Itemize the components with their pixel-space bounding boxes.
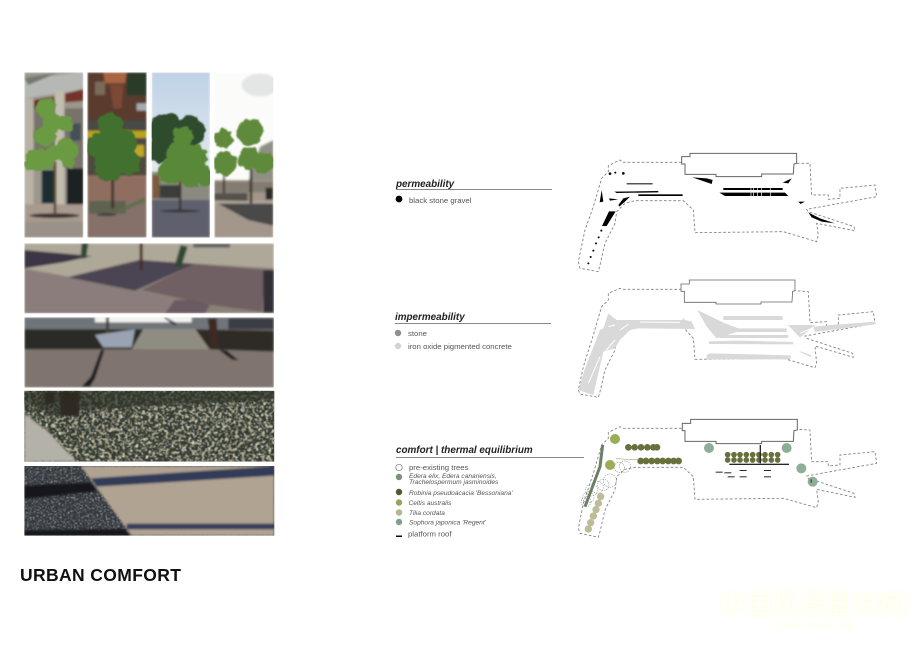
title: URBAN COMFORT: [20, 565, 181, 585]
legend item: Sophora: Sophora japonica 'Regent': [409, 520, 487, 526]
legend item: platform roof: platform roof: [408, 530, 452, 538]
photo: tree in square under blue sky: [152, 72, 210, 238]
Celtis trees: [605, 434, 620, 470]
Sophora trees: [704, 443, 818, 487]
photo: tree in front of colonnade: [24, 72, 83, 238]
legend item: Celtis: [396, 499, 452, 507]
legend item: Celtis: Celtis australis: [408, 500, 452, 507]
Robinia trees: [625, 444, 780, 464]
legend item: Robinia: Robinia pseudoacacia 'Bessoniana': [409, 490, 513, 497]
watermark: 中国风景园林网: [719, 590, 908, 620]
photo: concrete walkway crossing gravel: [24, 317, 274, 388]
plan: impermeability: [578, 280, 875, 397]
legend item: stone: stone: [408, 329, 427, 338]
legend item: pre-existing trees: pre-existing trees: [409, 463, 469, 472]
photo: concrete slab beside gravel: [24, 466, 274, 536]
heading: impermeability: impermeability: [395, 312, 465, 323]
legend item: Edera: Edera elix, Edera canariensis,: [409, 473, 497, 480]
legend item: Tilia: [396, 509, 445, 517]
section: comfort legend: [396, 445, 584, 538]
watermark: chla.com.cn: [774, 620, 853, 631]
photo: tree against brick building: [87, 72, 147, 238]
photo: ivy ground cover: [24, 391, 274, 462]
pre-existing trees: [581, 461, 631, 507]
platform roofs: [716, 445, 812, 483]
plan: comfort: [578, 419, 877, 537]
heading: permeability: permeability: [395, 179, 455, 190]
legend item: Tilia: Tilia cordata: [409, 510, 445, 517]
photo: paving with gravel tree pit: [24, 243, 274, 313]
legend item: iron oxide pigmented concrete: iron oxide pigmented concrete: [408, 342, 512, 351]
section: permeability legend: [395, 179, 552, 205]
photo: trees along shaded paving: [213, 72, 278, 238]
Edera planting strip: [585, 445, 603, 507]
legend item: Edera: [396, 473, 499, 486]
heading: comfort thermal equilibrium: comfort | thermal equilibrium: [396, 445, 533, 456]
Tilia trees: [585, 493, 604, 533]
section: impermeability legend: [395, 312, 551, 351]
legend item: stone: [395, 329, 427, 338]
plan: permeability: [578, 153, 877, 272]
legend item: black stone gravel: black stone gravel: [409, 196, 472, 205]
legend item: Edera: Trachelospermum jasminoides: [409, 479, 499, 486]
